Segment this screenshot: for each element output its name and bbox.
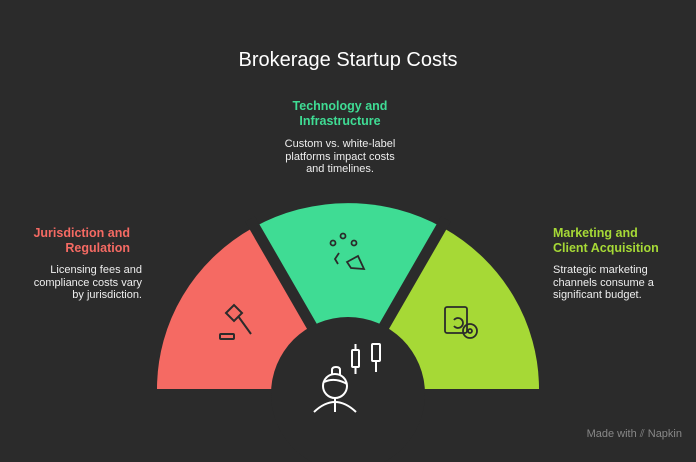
icon: gavel xyxy=(220,305,251,339)
icon: gear panel xyxy=(445,307,477,338)
heading: technology xyxy=(292,99,387,128)
heading: marketing: Client Acquisition xyxy=(553,241,659,255)
title: Brokerage Startup Costs xyxy=(238,49,458,71)
heading: jurisdiction: Regulation xyxy=(65,241,130,255)
heading: jurisdiction: Jurisdiction and xyxy=(33,226,130,240)
heading: jurisdiction xyxy=(33,226,130,255)
text: jurisdiction: Licensing fees and compliance costs vary by jurisdiction. xyxy=(34,264,142,301)
segment: technology xyxy=(252,203,444,389)
icon: megaphone xyxy=(330,234,364,269)
segment: jurisdiction xyxy=(157,228,348,389)
heading: marketing xyxy=(553,226,659,255)
heading: marketing: Marketing and xyxy=(553,226,638,240)
heading: technology: Infrastructure xyxy=(299,114,381,128)
text: marketing: Strategic marketing channels consume a significant budget. xyxy=(553,264,654,301)
text: technology: Custom vs. white-label platforms impact costs and timelines. xyxy=(285,138,395,175)
segment: marketing xyxy=(348,228,539,389)
icon: trader xyxy=(314,344,380,412)
watermark: Made with ⫽ Napkin xyxy=(587,428,682,440)
heading: technology: Technology and xyxy=(293,99,387,113)
